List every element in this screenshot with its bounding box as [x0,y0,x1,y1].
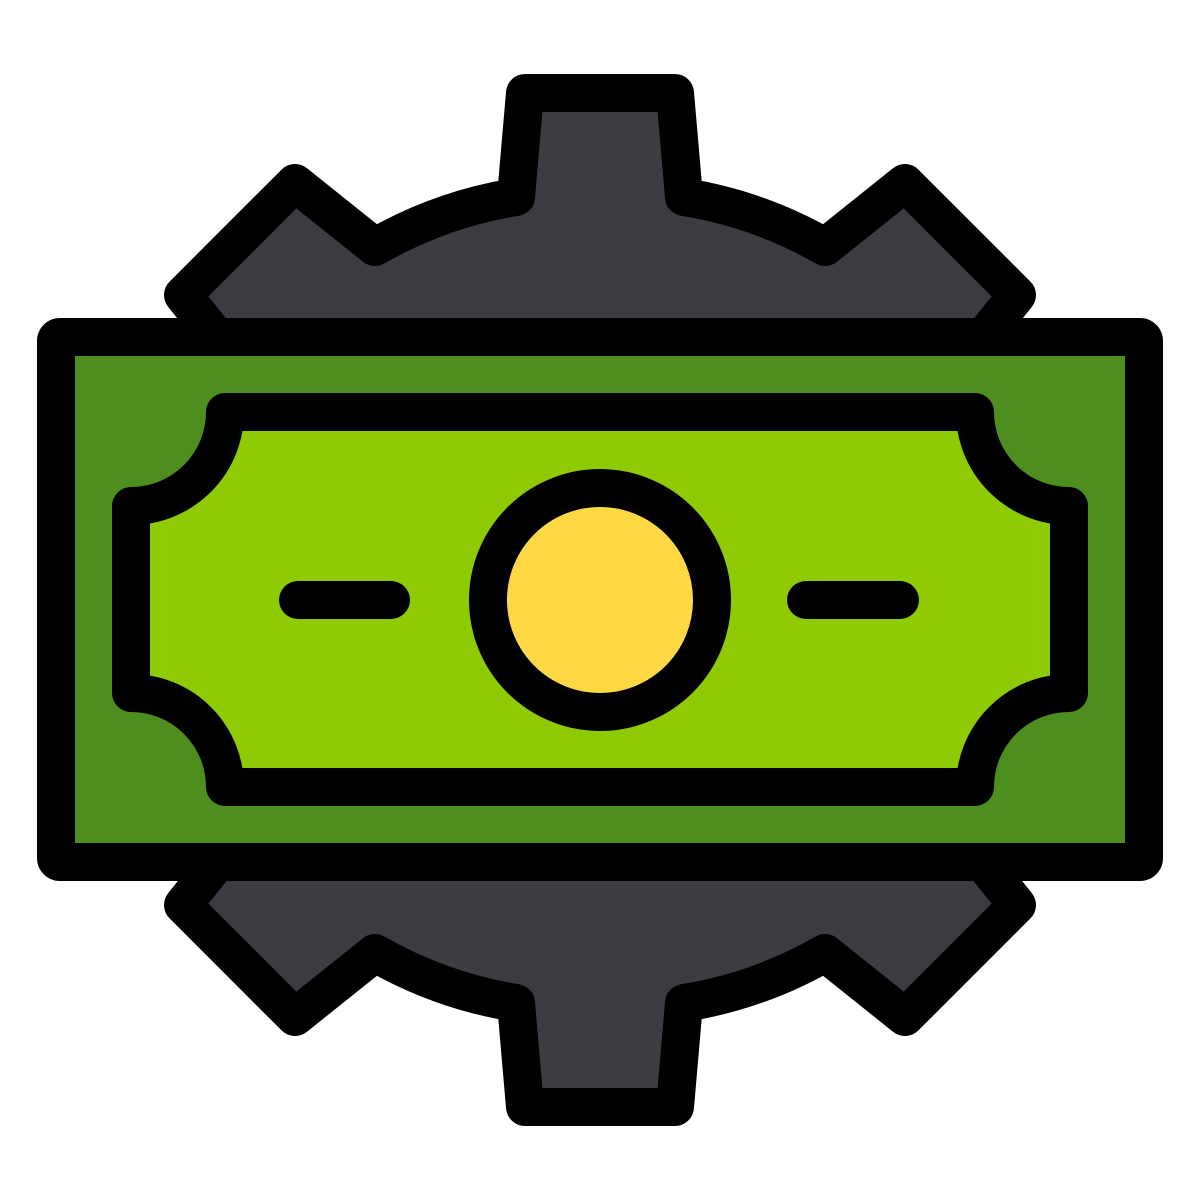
right dash [806,581,900,619]
coin circle [488,488,712,712]
left dash [298,581,391,619]
banknote inner panel [131,412,1069,787]
icon: banknote [56,337,1144,862]
icon: gear [93,93,1107,1107]
